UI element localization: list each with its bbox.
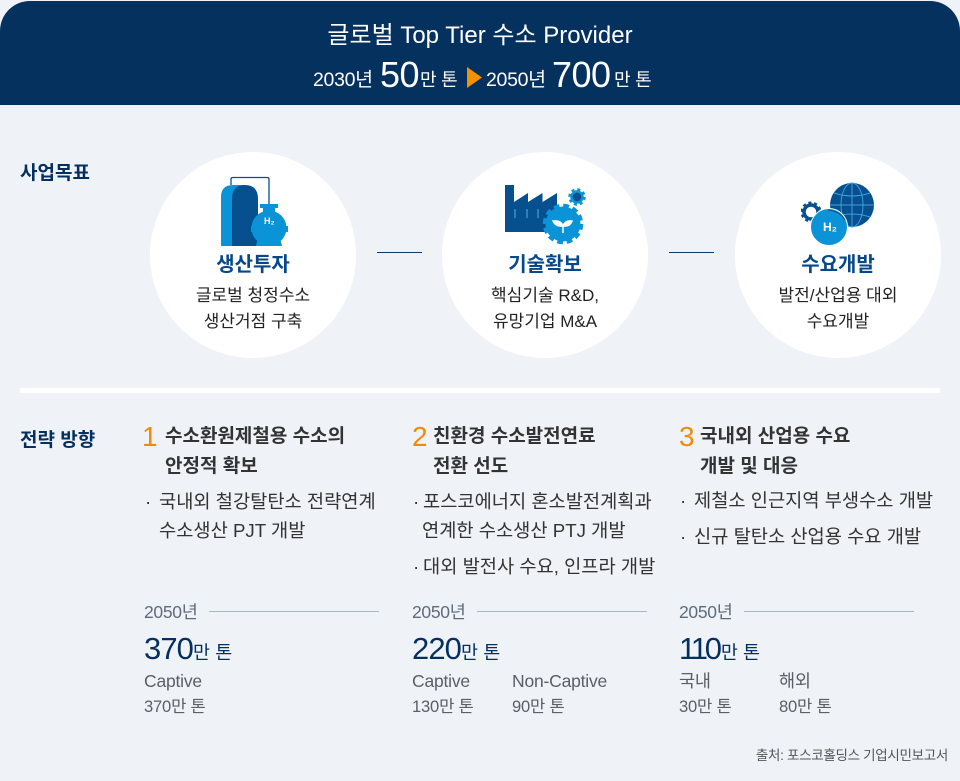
volume 2: 220만 톤 (412, 631, 500, 666)
strategy 3 heading: 개발 및 대응 (700, 456, 798, 476)
2050 label 2: 2050년 (412, 602, 466, 622)
2050 label 1: 2050년 (144, 602, 198, 622)
breakdown: captive 2: 130만 톤 (412, 696, 474, 716)
heading: 생산투자 (216, 254, 290, 276)
strategy 2 heading: 친환경 수소발전연료 (433, 426, 596, 447)
icon: globe, gear and hydrogen: H₂ (823, 220, 837, 234)
description: 글로벌 청정수소 (196, 286, 310, 305)
strategy 2 bullet a: 연계한 수소생산 PTJ 개발 (422, 520, 626, 540)
strategy 2 bullet b: · (413, 556, 419, 577)
number 3: 3 (679, 421, 695, 452)
divider (20, 388, 940, 393)
breakdown: captive 2 (412, 671, 474, 716)
panel: strategy 2 (412, 421, 655, 716)
arrow: 2030 to 2050 (467, 67, 482, 88)
strategy 1 bullets (145, 491, 376, 540)
strategy 3 heading: 국내외 산업용 수요 (700, 426, 850, 447)
strategy 1 bullets: · (145, 491, 151, 512)
strategy 1 bullets: 수소생산 PJT 개발 (159, 520, 305, 540)
breakdown: captive 2: Captive (412, 671, 470, 691)
strategy 3 bullet b: 신규 탈탄소 산업용 수요 개발 (694, 526, 921, 547)
icon: hydrogen tanks (221, 176, 288, 246)
number 1: 1 (142, 421, 158, 452)
icon: globe, gear and hydrogen (801, 182, 874, 245)
connector (669, 252, 714, 253)
breakdown: domestic: 국내 (679, 671, 711, 691)
heading: 기술확보 (508, 254, 582, 276)
strategy 3 bullet b: · (680, 526, 686, 547)
strategy 2 heading: 전환 선도 (433, 456, 508, 476)
breakdown: captive 1: 370만 톤 (144, 696, 206, 716)
icon: hydrogen tanks: H₂ (264, 216, 274, 226)
heading: 수요개발 (801, 254, 875, 276)
panel: demand development (735, 152, 941, 358)
title: 글로벌 Top Tier 수소 Provider (327, 22, 633, 49)
breakdown: captive 1 (144, 671, 206, 716)
breakdown: captive 1: Captive (144, 671, 202, 691)
strategy 1 heading: 안정적 확보 (165, 456, 258, 476)
volume 3: 110만 톤 (679, 631, 760, 666)
target: 2030: 50 (380, 54, 419, 94)
strategy 2 heading (433, 426, 596, 476)
breakdown: overseas: 해외 (779, 671, 811, 691)
description: 수요개발 (807, 312, 869, 331)
strategy 2 bullet a: 포스코에너지 혼소발전계획과 (423, 491, 652, 512)
target: 2030: 만 톤 (420, 70, 458, 90)
strategy 3 bullet a: · (680, 490, 686, 511)
breakdown: overseas (779, 671, 832, 716)
source: 출처: 포스코홀딩스 기업시민보고서 (756, 748, 948, 763)
description (491, 286, 599, 331)
breakdown: non-captive: 90만 톤 (512, 696, 565, 716)
volume 1: 370만 톤 (144, 631, 232, 666)
target: 2030 (313, 54, 458, 94)
description: 유망기업 M&A (493, 312, 597, 331)
target: 2050: 700 (552, 54, 611, 94)
panel: production investment (150, 152, 356, 358)
description (779, 286, 897, 331)
target: 2050 (486, 54, 652, 94)
section label: strategic direction: 전략 방향 (20, 430, 95, 451)
strategy 1 heading: 수소환원제철용 수소의 (165, 426, 345, 447)
target: 2030: 2030년 (313, 69, 373, 91)
breakdown: domestic (679, 671, 732, 716)
header banner (0, 1, 960, 105)
panel: strategy 1 (142, 421, 379, 716)
breakdown: non-captive (512, 671, 607, 716)
strategy 1 heading (165, 426, 345, 476)
target: 2050: 만 톤 (614, 70, 652, 90)
strategy 1 bullets: 국내외 철강탈탄소 전략연계 (159, 491, 376, 512)
description: 생산거점 구축 (204, 312, 302, 331)
strategy 2 bullet b: 대외 발전사 수요, 인프라 개발 (423, 556, 655, 577)
section label: business goals: 사업목표 (20, 163, 90, 184)
strategy 2 bullet a (413, 491, 652, 540)
2050 label 3: 2050년 (679, 602, 733, 622)
description (196, 286, 310, 331)
strategy 3 bullet a: 제철소 인근지역 부생수소 개발 (694, 490, 933, 511)
target: 2050: 2050년 (486, 69, 546, 91)
panel: strategy 3 (679, 421, 933, 716)
number 2: 2 (412, 421, 428, 452)
icon: factory and gears (505, 185, 586, 244)
strategy 3 heading (700, 426, 850, 476)
description: 핵심기술 R&D, (491, 286, 599, 305)
strategy 2 bullet a: · (413, 491, 419, 512)
connector (377, 252, 422, 253)
breakdown: domestic: 30만 톤 (679, 696, 732, 716)
breakdown: non-captive: Non-Captive (512, 671, 607, 691)
panel: technology (442, 152, 648, 358)
breakdown: overseas: 80만 톤 (779, 696, 832, 716)
description: 발전/산업용 대외 (779, 286, 897, 305)
